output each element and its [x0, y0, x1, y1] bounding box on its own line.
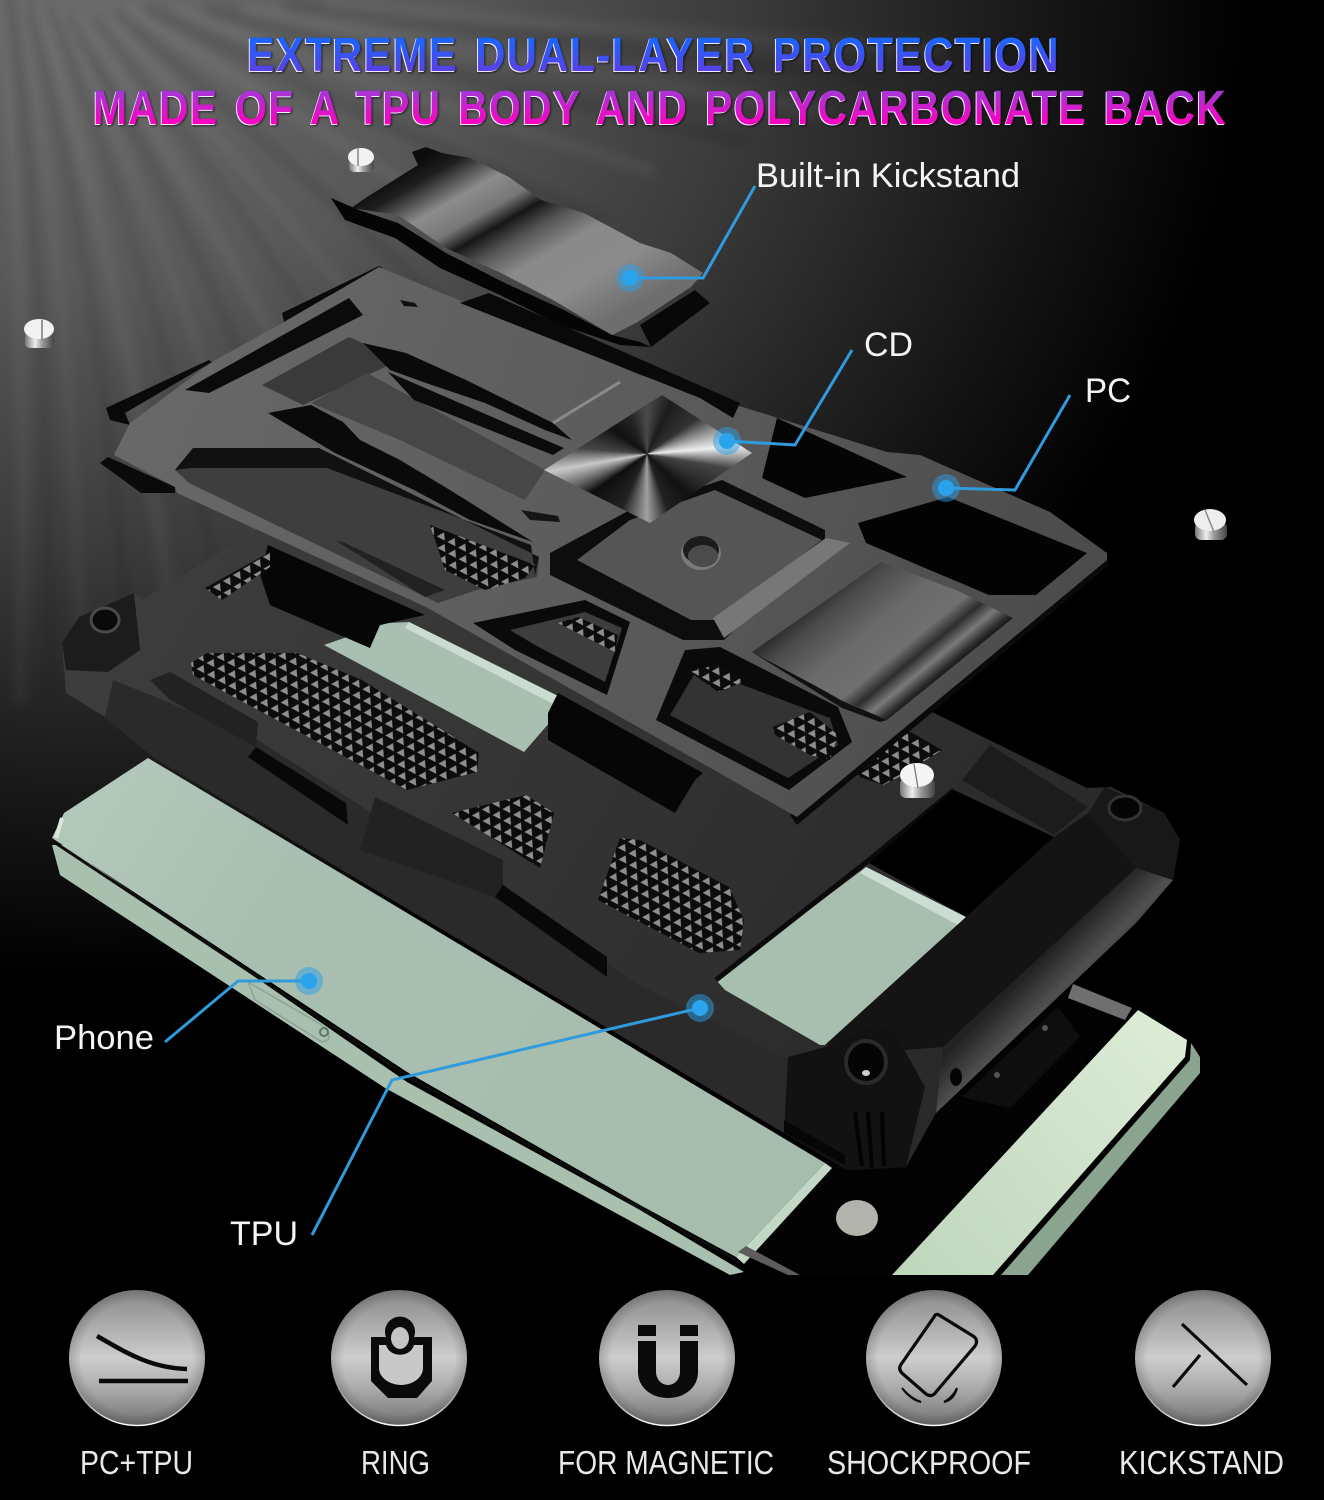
case body [62, 477, 1180, 1170]
feature: ring: RING [361, 1444, 430, 1481]
feature: kickstand: KICKSTAND [1119, 1444, 1284, 1481]
TPU case [62, 477, 1180, 1170]
screw four [900, 763, 935, 798]
corner bumper upper right [1088, 787, 1180, 880]
feature: PC+TPU [69, 1290, 205, 1481]
kickstand underside [331, 198, 651, 347]
callout: TPU [230, 994, 714, 1253]
plate tab one [106, 360, 212, 425]
callout: CD [713, 326, 913, 455]
phone side band [52, 845, 744, 1275]
centre hole [681, 536, 721, 570]
plate mesh pad D [690, 665, 748, 692]
grip: small mesh pad [452, 795, 554, 868]
window black rim [716, 790, 954, 980]
phone [52, 758, 1200, 1275]
case side strip [105, 680, 790, 1133]
title line one: EXTREME DUAL-LAYER PROTECTION [247, 29, 1060, 82]
phone edge line [54, 842, 736, 1260]
icon: magnet [599, 1290, 735, 1426]
feature: for magnetic [558, 1290, 774, 1481]
icon: ring [331, 1290, 467, 1426]
upper black band [460, 293, 740, 418]
hexagon hole one [762, 418, 907, 498]
case slot two [495, 885, 607, 977]
case black block upper [260, 545, 425, 648]
phone lower side band [1001, 1043, 1200, 1275]
kickstand surface [351, 147, 703, 335]
phone back panel [52, 758, 825, 1257]
icon: kickstand [1135, 1290, 1271, 1426]
case side panel [936, 868, 1173, 1113]
title [93, 29, 1227, 135]
centre square [577, 490, 822, 620]
feature: kickstand [1119, 1290, 1284, 1481]
icon: shockproof phone [866, 1290, 1002, 1426]
screws [24, 148, 1227, 798]
feature: shockproof [827, 1290, 1031, 1481]
plate mesh pad C [773, 712, 838, 760]
hexagon hole two [858, 497, 1087, 595]
corner bumper upper left [62, 593, 140, 672]
long slot [388, 372, 564, 455]
top kickstand [331, 147, 710, 347]
plate mesh pad left window [558, 617, 618, 652]
corner bumper lower [784, 1025, 925, 1170]
kickstand block [640, 290, 710, 347]
case side bar [825, 813, 1136, 1050]
wavy slot one [363, 343, 572, 440]
window inner rim [175, 448, 539, 575]
plate tab three [100, 457, 175, 493]
plate recess two [311, 373, 545, 500]
case button two [360, 797, 503, 897]
case side hole [950, 1068, 962, 1086]
PC plate [100, 266, 1109, 825]
callout: CD: CD [864, 326, 913, 364]
case button one [150, 672, 258, 747]
plate mesh pad A [430, 525, 535, 590]
icon: layers [69, 1290, 205, 1426]
feature: for magnetic: FOR MAGNETIC [558, 1444, 774, 1481]
grip: large mesh pad [191, 653, 479, 790]
callout: built-in kickstand: Built-in Kickstand [756, 157, 1020, 195]
camera module [962, 1007, 1080, 1108]
phone top highlight [56, 818, 62, 838]
callout: PC: PC [1085, 372, 1131, 410]
callout: PC [932, 372, 1131, 502]
plate tab two [282, 266, 383, 322]
lower frame window [175, 448, 539, 603]
CD disc [544, 395, 752, 523]
screw three [1194, 509, 1227, 540]
sim tray [248, 982, 329, 1042]
feature: shockproof: SHOCKPROOF [827, 1444, 1031, 1481]
plate body [114, 267, 1107, 817]
plate underside [790, 553, 1109, 825]
grip: mesh pad top left [205, 552, 270, 600]
screw two [24, 319, 54, 348]
plate black slot [185, 298, 363, 393]
centre recess rim [550, 480, 825, 640]
callout: TPU: TPU [230, 1215, 298, 1253]
flash [836, 1200, 878, 1236]
lower window left [473, 600, 630, 695]
plate recess one [262, 337, 400, 405]
phone camera bar [738, 987, 1132, 1275]
lower kickstand [752, 562, 1013, 722]
case seen through window [335, 540, 445, 597]
feature: ring [331, 1290, 467, 1481]
grip: mesh pad right [854, 730, 942, 785]
angled strip [713, 538, 850, 638]
screw one [348, 148, 374, 172]
phone lower green band [892, 1010, 1187, 1275]
grip: mesh pad top [298, 518, 333, 542]
case camera opening [869, 790, 1054, 917]
lower window right [656, 647, 852, 790]
callout: phone [54, 967, 323, 1057]
camera grey rail [1068, 984, 1132, 1020]
case black block middle [548, 693, 703, 813]
feature: PC+TPU: PC+TPU [80, 1444, 193, 1481]
wavy slot two [268, 405, 533, 542]
case top frame [962, 745, 1088, 835]
case green window upper [324, 622, 560, 752]
grip: wide mesh pad [598, 838, 744, 953]
callout: phone: Phone [54, 1019, 154, 1057]
case slot one [248, 747, 348, 825]
case green window lower [716, 867, 966, 1045]
callout: built-in kickstand [616, 157, 1020, 292]
thin bar [553, 382, 620, 423]
small clip [521, 510, 560, 522]
small pill [400, 300, 418, 307]
